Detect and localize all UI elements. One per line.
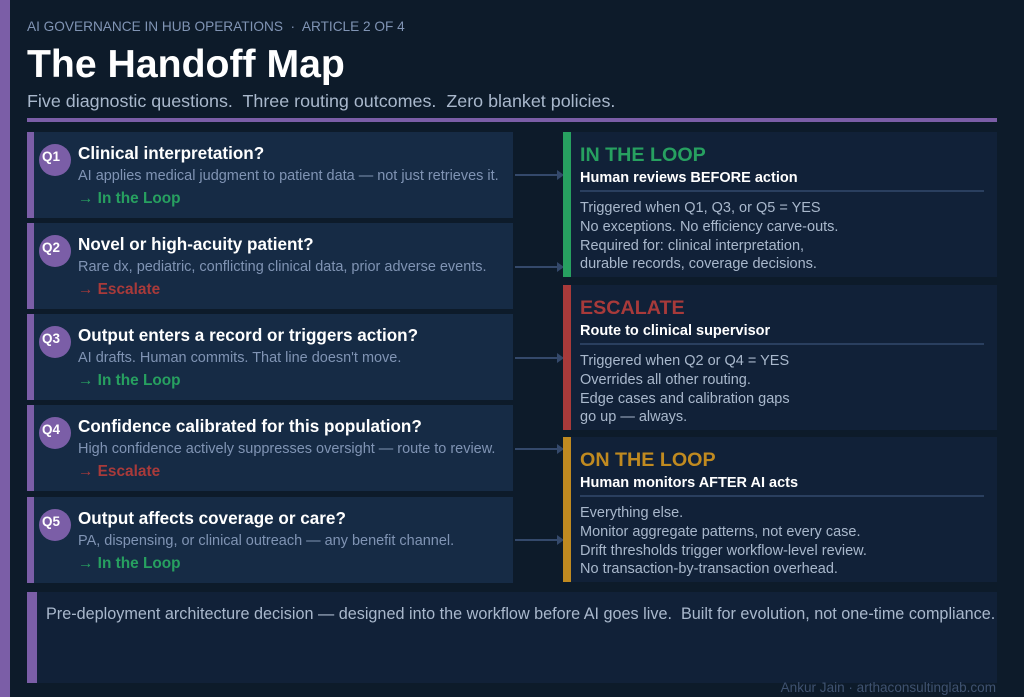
eyebrow: AI GOVERNANCE IN HUB OPERATIONS · ARTICLE 2 OF 4: [27, 19, 405, 34]
panel: question 5: [27, 497, 513, 583]
panel: question 3: Q3: [42, 331, 60, 346]
panel: escalate: Route to clinical supervisor: [580, 323, 770, 339]
panel: question 4: Confidence calibrated for this population?: [78, 417, 422, 436]
panel: question 3: → In the Loop: [78, 372, 181, 389]
panel: in the loop: Human reviews BEFORE action: [580, 170, 798, 186]
panel: on the loop: Monitor aggregate patterns, not every case.: [580, 524, 860, 540]
panel: on the loop: [563, 437, 997, 582]
panel: question 4: → Escalate: [78, 463, 160, 480]
title: The Handoff Map: [27, 43, 345, 86]
panel: in the loop: durable records, coverage decisions.: [580, 256, 817, 272]
panel: escalate: go up — always.: [580, 409, 687, 425]
arrow: Q4: [515, 444, 563, 454]
panel: on the loop: Everything else.: [580, 505, 683, 521]
panel: question 4: [27, 405, 513, 491]
panel: question 4: Q4: [42, 422, 60, 437]
panel: on the loop: Human monitors AFTER AI acts: [580, 475, 798, 491]
panel: question 5: PA, dispensing, or clinical outreach — any benefit channel.: [78, 533, 454, 549]
subtitle: Five diagnostic questions. Three routing outcomes. Zero blanket policies.: [27, 91, 615, 111]
panel: in the loop: [563, 132, 997, 277]
header rule: [27, 118, 997, 122]
panel: question 1: Clinical interpretation?: [78, 144, 264, 163]
panel: question 3: AI drafts. Human commits. That line doesn't move.: [78, 350, 401, 366]
panel: question 2: Novel or high-acuity patient?: [78, 235, 314, 254]
panel: in the loop: No exceptions. No efficiency carve-outs.: [580, 219, 838, 235]
panel: escalate: Edge cases and calibration gaps: [580, 391, 790, 407]
panel: question 2: [27, 223, 513, 309]
panel: on the loop: Drift thresholds trigger workflow-level review.: [580, 543, 867, 559]
arrow: Q3: [515, 353, 563, 363]
panel: question 5: → In the Loop: [78, 555, 181, 572]
panel: question 4: High confidence actively suppresses oversight — route to review.: [78, 441, 495, 457]
panel: on the loop: No transaction-by-transaction overhead.: [580, 561, 838, 577]
panel: in the loop: IN THE LOOP: [580, 144, 706, 166]
panel: question 1: [27, 132, 513, 218]
left accent stripe: [0, 0, 10, 697]
panel: question 2: → Escalate: [78, 281, 160, 298]
panel: question 3: [27, 314, 513, 400]
panel: question 3: Output enters a record or triggers action?: [78, 326, 418, 345]
panel: question 1: → In the Loop: [78, 190, 181, 207]
panel: question 1: AI applies medical judgment to patient data — not just retrieves it.: [78, 168, 499, 184]
credit: Ankur Jain · arthaconsultinglab.com: [781, 680, 996, 695]
panel: footer callout: Pre-deployment architecture decision — designed into the workflow before AI goes live. Built for evolution, not one-time compliance.: [46, 605, 995, 623]
panel: escalate: ESCALATE: [580, 297, 685, 319]
panel: escalate: Triggered when Q2 or Q4 = YES: [580, 353, 789, 369]
panel: question 5: Q5: [42, 514, 60, 529]
panel: question 5: Output affects coverage or care?: [78, 509, 346, 528]
panel: in the loop: Required for: clinical interpretation,: [580, 238, 804, 254]
panel: question 1: Q1: [42, 149, 60, 164]
arrow: Q5: [515, 535, 563, 545]
panel: footer callout: [27, 592, 997, 683]
panel: escalate: Overrides all other routing.: [580, 372, 751, 388]
panel: on the loop: ON THE LOOP: [580, 449, 716, 471]
panel: escalate: [563, 285, 997, 430]
arrow: Q1: [515, 170, 563, 180]
arrow: Q2: [515, 262, 563, 272]
panel: question 2: Q2: [42, 240, 60, 255]
panel: in the loop: Triggered when Q1, Q3, or Q5 = YES: [580, 200, 821, 216]
panel: question 2: Rare dx, pediatric, conflicting clinical data, prior adverse events.: [78, 259, 487, 275]
